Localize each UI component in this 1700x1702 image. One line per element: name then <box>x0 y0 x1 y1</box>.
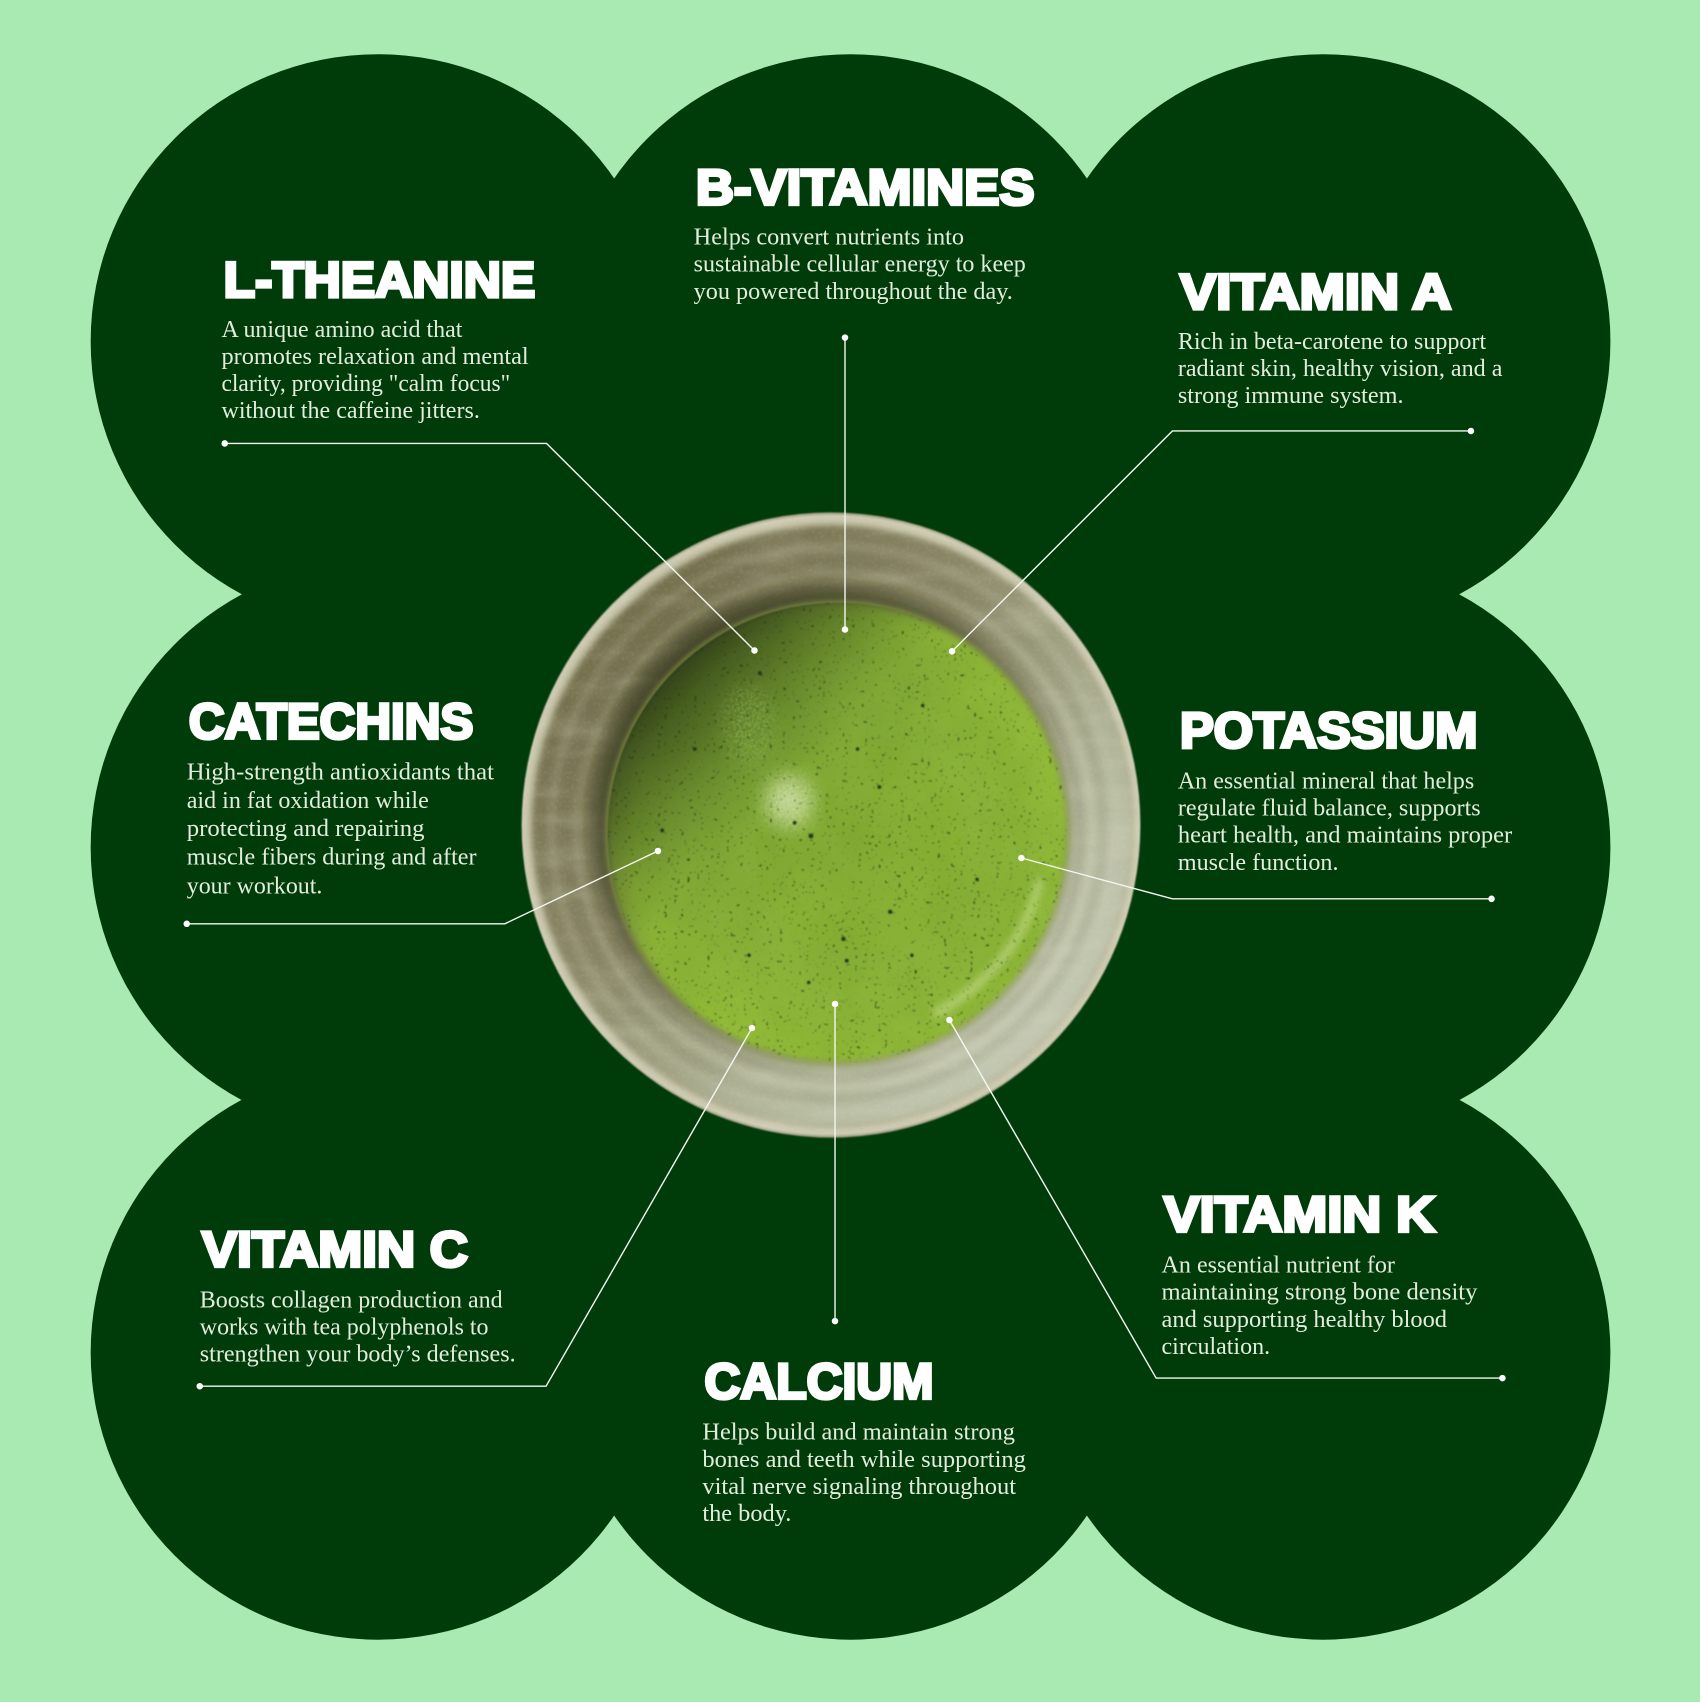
description: muscle function. <box>1178 850 1338 876</box>
leader line <box>842 334 848 633</box>
description <box>1178 329 1503 409</box>
description: regulate fluid balance, supports <box>1178 796 1481 822</box>
description: Rich in beta-carotene to support <box>1178 329 1486 355</box>
description: maintaining strong bone density <box>1162 1280 1477 1306</box>
leader line <box>832 1001 838 1324</box>
description <box>1162 1253 1477 1360</box>
description <box>221 317 529 424</box>
heading: CALCIUM <box>705 1354 934 1410</box>
description: the body. <box>702 1501 791 1527</box>
description: An essential mineral that helps <box>1178 768 1474 794</box>
description <box>1178 768 1512 876</box>
heading: VITAMIN K <box>1164 1187 1435 1243</box>
description: you powered throughout the day. <box>694 279 1013 305</box>
leader line <box>1018 855 1495 902</box>
description <box>702 1420 1026 1527</box>
panel: Catechins <box>183 694 661 927</box>
description <box>187 760 494 900</box>
description: works with tea polyphenols to <box>200 1314 489 1340</box>
heading: B-VITAMINES <box>696 160 1035 216</box>
description: circulation. <box>1162 1334 1270 1360</box>
description: Boosts collagen production and <box>200 1287 503 1313</box>
description: Helps convert nutrients into <box>694 225 964 251</box>
heading: VITAMIN A <box>1180 264 1451 320</box>
leader line <box>183 848 661 927</box>
description: An essential nutrient for <box>1162 1253 1395 1279</box>
description: vital nerve signaling throughout <box>702 1474 1016 1500</box>
heading: VITAMIN C <box>202 1221 468 1277</box>
description: strong immune system. <box>1178 383 1404 409</box>
description <box>694 225 1026 305</box>
description: muscle fibers during and after <box>187 844 477 870</box>
icon: dark tea specks <box>660 671 979 984</box>
panel: B-Vitamines <box>694 160 1035 633</box>
panel: Potassium <box>1018 702 1512 902</box>
description: Helps build and maintain strong <box>702 1420 1015 1446</box>
leader line <box>221 440 758 654</box>
leader line <box>949 428 1474 655</box>
description: aid in fat oxidation while <box>187 788 429 814</box>
description: promotes relaxation and mental <box>221 344 529 370</box>
description: heart health, and maintains proper <box>1178 823 1512 849</box>
matcha bowl photo <box>510 510 1162 1162</box>
description: radiant skin, healthy vision, and a <box>1178 356 1503 382</box>
heading: L-THEANINE <box>224 252 535 308</box>
description: High-strength antioxidants that <box>187 760 494 786</box>
description: and supporting healthy blood <box>1162 1307 1447 1333</box>
leader line <box>197 1025 755 1389</box>
description: clarity, providing "calm focus" <box>221 371 510 397</box>
description: bones and teeth while supporting <box>702 1447 1026 1473</box>
panel: L-Theanine <box>221 252 758 654</box>
heading: CATECHINS <box>189 694 473 750</box>
leader line <box>946 1017 1506 1381</box>
description: A unique amino acid that <box>221 317 463 343</box>
description: sustainable cellular energy to keep <box>694 252 1026 278</box>
panel: Vitamin A <box>949 264 1503 655</box>
description <box>200 1287 516 1368</box>
panel: Vitamin K <box>946 1017 1506 1381</box>
description: protecting and repairing <box>187 816 425 842</box>
description: strengthen your body’s defenses. <box>200 1342 516 1368</box>
panel: Calcium <box>702 1001 1026 1527</box>
description: without the caffeine jitters. <box>221 398 480 424</box>
description: your workout. <box>187 874 322 900</box>
heading: POTASSIUM <box>1180 702 1477 758</box>
panel: Vitamin C <box>197 1025 755 1389</box>
